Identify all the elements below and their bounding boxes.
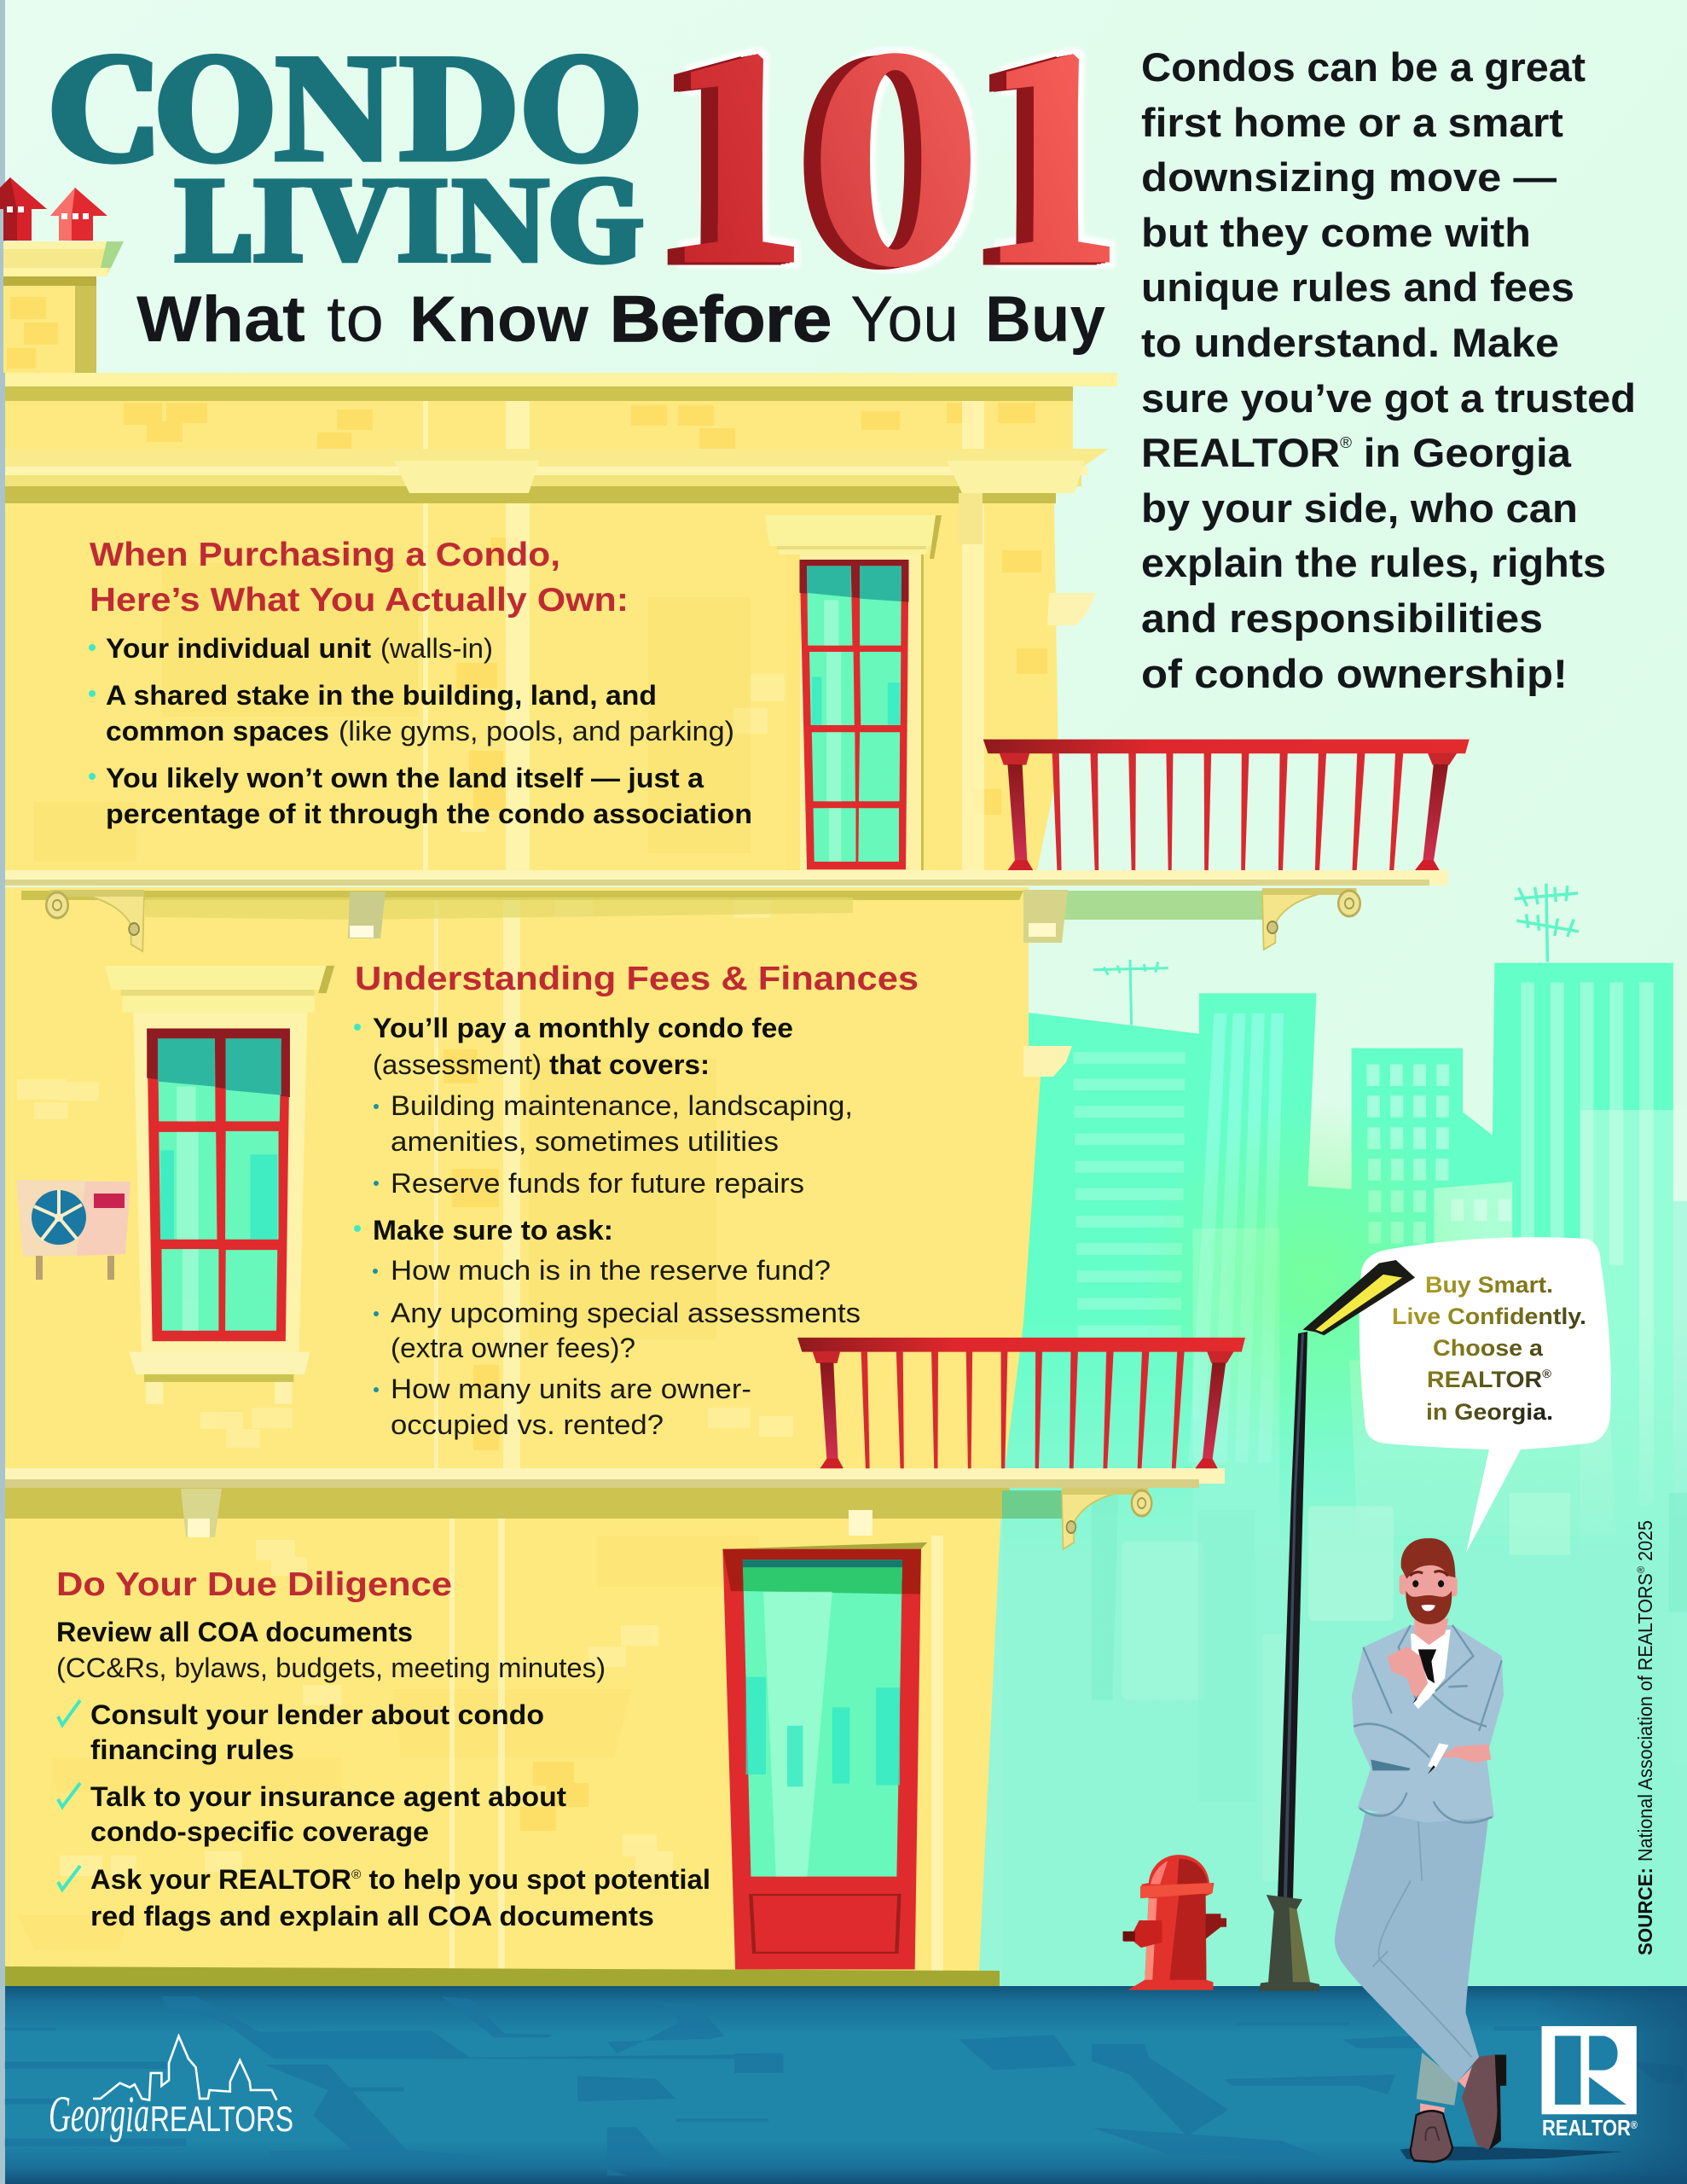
bullet list: ownership: You likely won’t own the land itself — just a: [106, 763, 704, 793]
bullet list: fees: How much is in the reserve fund?: [391, 1255, 831, 1286]
checklist: financing rules: [90, 1734, 294, 1765]
bullet list: fees: Reserve funds for future repairs: [391, 1168, 804, 1199]
intro paragraph: [1141, 44, 1636, 696]
subtitle: [136, 283, 1105, 356]
checklist: Ask your REALTOR: [90, 1864, 345, 1895]
subtitle: Buy: [985, 283, 1105, 356]
georgia realtors logo: Georgia: [49, 2086, 149, 2142]
facade pale vertical stripes: [423, 386, 984, 1971]
intro paragraph: but they come with: [1141, 210, 1531, 255]
door: [722, 1542, 927, 1970]
realtor logo: ®: [1631, 2118, 1638, 2131]
bullet list: fees: (extra owner fees)?: [391, 1333, 635, 1363]
heading: what you own: Here’s What You Actually Own:: [90, 582, 629, 619]
window 1: [765, 515, 942, 870]
bubble text: in Georgia.: [1426, 1399, 1553, 1425]
bubble text: ®: [1542, 1367, 1552, 1380]
heading: what you own: When Purchasing a Condo,: [90, 537, 560, 573]
title: Condo Living: CONDO: [49, 5, 641, 197]
subtitle: Know: [409, 283, 589, 356]
review documents: [56, 1617, 606, 1683]
bullet list: ownership: percentage of it through the condo association: [106, 799, 752, 829]
bullet list: fees: Any upcoming special assessments: [391, 1298, 861, 1328]
intro paragraph: REALTOR: [1141, 430, 1331, 475]
subtitle: What: [136, 283, 305, 356]
bullet list: fees: that covers:: [549, 1049, 710, 1080]
source credit: 2025: [1634, 1520, 1656, 1566]
checklist: Consult your lender about condo: [90, 1699, 544, 1730]
intro paragraph: Condos can be a great: [1141, 44, 1586, 90]
title: Condo Living: LIVING: [172, 139, 642, 291]
bullet list: ownership: A shared stake in the building, land, and: [106, 680, 657, 711]
bullet list: ownership: [89, 633, 752, 829]
window 2 with air conditioner: [16, 966, 334, 1404]
man in suit: [1335, 1538, 1623, 2162]
checklist: condo-specific coverage: [90, 1816, 429, 1847]
bullet list: ownership: Your individual unit: [106, 633, 371, 664]
street: [5, 1986, 1687, 2184]
title: Condo Living: [49, 5, 642, 291]
realtor logo: REALTOR: [1542, 2115, 1647, 2140]
bullet list: fees: You’ll pay a monthly condo fee: [373, 1013, 793, 1043]
source credit: SOURCE:: [1634, 1867, 1656, 1955]
review documents: Review all COA documents: [56, 1617, 413, 1647]
intro paragraph: unique rules and fees: [1141, 264, 1574, 310]
checklist: [58, 1699, 710, 1931]
icon: air conditioner: [16, 1180, 130, 1280]
left page edge: [0, 0, 5, 2184]
building: yellow facade: [5, 373, 1448, 1986]
hydrant: [1123, 1855, 1226, 1990]
bubble text: Live Confidently.: [1392, 1304, 1586, 1329]
bubble text: Choose a: [1433, 1335, 1544, 1361]
heading: what you own: [90, 537, 629, 619]
panel: fees and finances: [354, 961, 919, 1440]
bottom ledge: [5, 1966, 1000, 1986]
panel: what you actually own: [89, 537, 752, 829]
source credit: National Association of REALTORS: [1634, 1554, 1656, 1862]
corbels: [181, 890, 1068, 1537]
subtitle: Before: [610, 283, 832, 356]
balcony 1 railing: [983, 740, 1470, 870]
realtor logo: [1542, 2026, 1638, 2140]
heading: fees: Understanding Fees & Finances: [355, 961, 919, 997]
bullet list: ownership: (like gyms, pools, and parking): [339, 716, 734, 746]
heading: due diligence: Do Your Due Diligence: [56, 1566, 452, 1603]
review documents: (CC&Rs, bylaws, budgets, meeting minutes): [56, 1653, 606, 1683]
intro paragraph: explain the rules, rights: [1141, 540, 1606, 585]
bubble text: [1392, 1272, 1586, 1425]
intro paragraph: by your side, who can: [1141, 485, 1578, 531]
intro paragraph: and responsibilities: [1141, 595, 1543, 641]
lamp head: [1303, 1260, 1415, 1335]
checklist: ®: [351, 1867, 361, 1882]
chimney with vents: [0, 177, 124, 373]
cornices and ledges: [5, 373, 1448, 1519]
subtitle: to: [327, 283, 384, 356]
title: 101 extruded numerals: [669, 0, 1124, 338]
bullet list: fees: [354, 1013, 861, 1440]
checklist: red flags and explain all COA documents: [90, 1901, 654, 1931]
bullet list: fees: occupied vs. rented?: [391, 1409, 664, 1440]
brackets: [46, 891, 1360, 1549]
source credit: ®: [1635, 1566, 1647, 1573]
bullet list: fees: How many units are owner-: [391, 1374, 751, 1404]
brick patches: [17, 403, 1047, 1949]
intro paragraph: of condo ownership!: [1141, 651, 1568, 696]
georgia realtors logo: [49, 2036, 293, 2142]
intro paragraph: to understand. Make: [1141, 320, 1559, 365]
georgia realtors logo: REALTORS: [150, 2099, 293, 2139]
balcony 2 railing: [797, 1338, 1245, 1468]
checklist: to help you spot potential: [361, 1864, 710, 1895]
city skyline: [938, 884, 1687, 2002]
bullet list: fees: Make sure to ask:: [373, 1215, 613, 1246]
panel: due diligence: [56, 1566, 710, 1931]
bullet list: ownership: common spaces: [106, 716, 329, 746]
intro paragraph: first home or a smart: [1141, 100, 1563, 145]
icon: antennas: [1093, 884, 1579, 1025]
intro paragraph: sure you’ve got a trusted: [1141, 375, 1636, 421]
bubble text: Buy Smart.: [1425, 1272, 1553, 1298]
bullet list: ownership: (walls-in): [380, 633, 493, 664]
speech bubble: [1359, 1237, 1611, 1553]
checklist: Talk to your insurance agent about: [90, 1781, 566, 1812]
bullet list: fees: amenities, sometimes utilities: [391, 1126, 779, 1157]
street lamp: [1259, 1332, 1319, 1991]
subtitle: You: [850, 283, 959, 356]
intro paragraph: ®: [1340, 434, 1352, 451]
bullet list: fees: (assessment): [373, 1049, 542, 1080]
intro paragraph: in Georgia: [1352, 430, 1572, 475]
bubble text: REALTOR: [1427, 1367, 1536, 1392]
intro paragraph: downsizing move —: [1141, 154, 1557, 200]
bullet list: fees: Building maintenance, landscaping,: [391, 1090, 853, 1121]
